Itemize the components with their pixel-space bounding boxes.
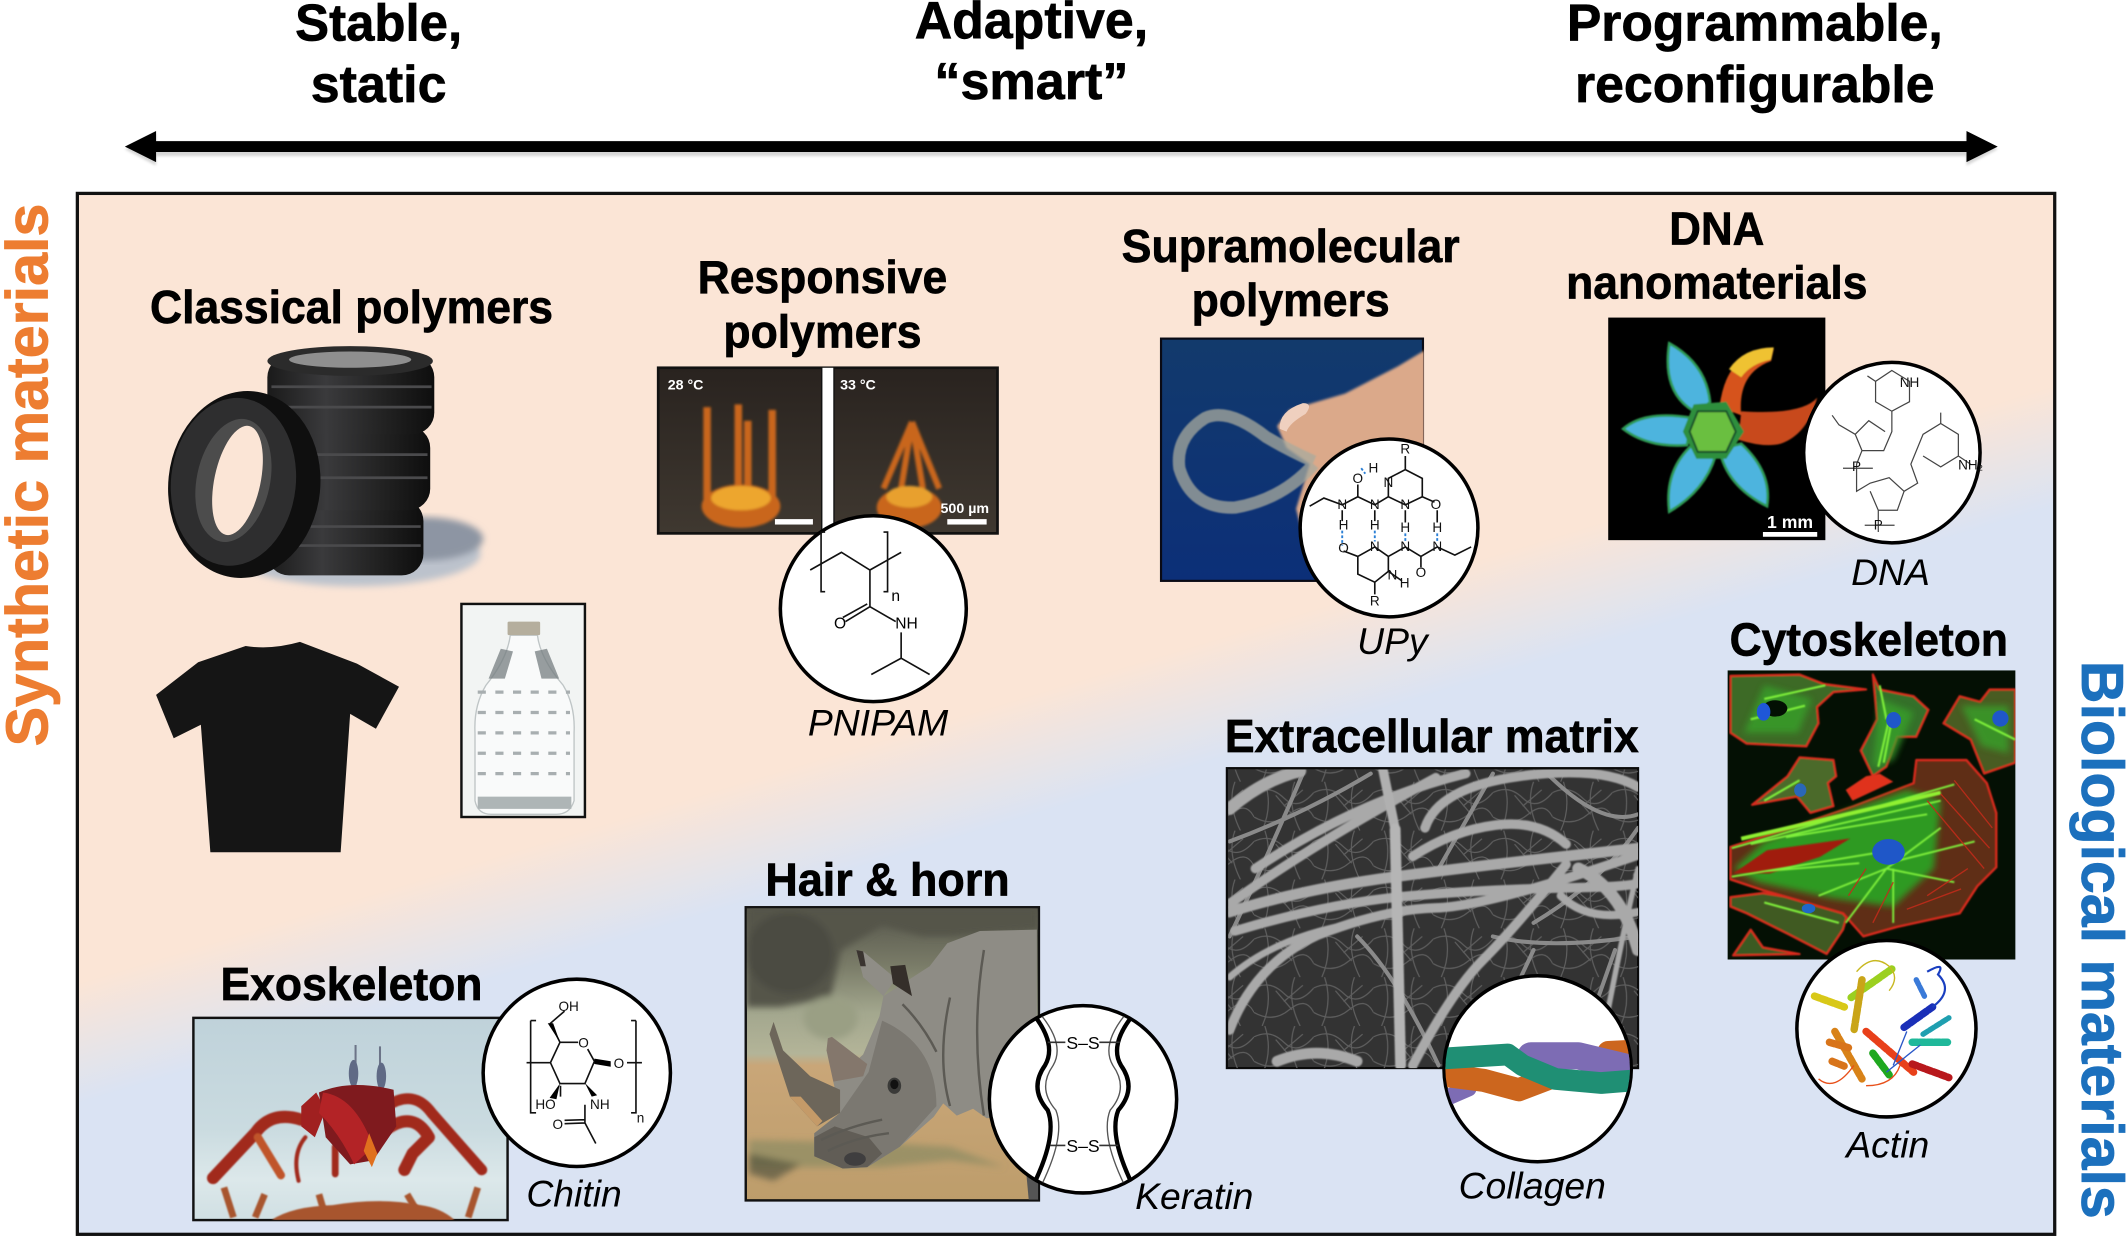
chemical structure: UPy: N [1400,497,1410,512]
chemical structure: UPy: O [1353,471,1363,486]
label: keratin: Keratin [1135,1175,1253,1217]
chemical structure: DNA: NH [1900,375,1919,390]
chemical structure: PNIPAM: NH [895,615,918,632]
chemical structure: PNIPAM: O [834,615,846,632]
chemical structure: DNA: NH₂ [1958,458,1983,473]
label: collagen: Collagen [1459,1164,1606,1206]
chemical structure: DNA: P [1874,517,1883,532]
photo: extracellular matrix SEM [1227,768,1644,1068]
chemical structure: keratin [989,1006,1177,1194]
chemical structure: UPy: O [1416,565,1426,580]
label: 33 °C: 33 °C [840,378,876,394]
protein structure: collagen [1441,976,1635,1162]
top heading: adaptive, smart: “smart” [934,52,1128,110]
chemical structure: UPy: N [1370,497,1380,512]
chemical structure: UPy: N [1432,539,1442,554]
chemical structure: UPy: N [1400,539,1410,554]
heading: cytoskeleton: Cytoskeleton [1730,614,2008,666]
top heading: stable, static: static [311,55,447,113]
heading: responsive polymers: polymers [723,305,921,357]
label: UPy: UPy [1357,620,1430,662]
top heading: stable, static [295,0,462,113]
chemical structure: UPy: H [1370,517,1380,532]
chemical structure: UPy: N [1370,539,1380,554]
chemical structure: PNIPAM: n [891,588,900,605]
chemical structure: UPy: O [1431,497,1441,512]
chemical structure: UPy: H [1400,576,1410,591]
heading: supramolecular polymers: Supramolecular [1122,220,1460,272]
photo: rhino [746,907,1039,1200]
label: 1 mm: 1 mm [1767,512,1813,532]
heading: supramolecular polymers [1122,220,1460,326]
chemical structure: UPy: H [1369,460,1378,475]
chemical structure: DNA [1804,362,1983,543]
heading: classical polymers: Classical polymers [150,281,553,333]
chemical structure: UPy: N [1383,475,1393,490]
heading: DNA nanomaterials [1566,202,1867,309]
label: actin: Actin [1844,1124,1929,1166]
label: 500 µm: 500 µm [940,501,989,517]
photo: UPy polymer band [1161,339,1425,581]
label: chitin: Chitin [526,1173,622,1215]
photo: DNA flower [1608,318,1825,540]
chemical structure: PNIPAM [780,516,966,702]
heading: DNA nanomaterials: DNA [1669,202,1764,254]
chemical structure: UPy: R [1370,593,1380,608]
heading: extracellular matrix: Extracellular matrix [1225,710,1639,762]
heading: DNA nanomaterials: nanomaterials [1566,257,1867,309]
icon: water bottle [461,604,585,817]
chemical structure: UPy: N [1388,568,1397,583]
icon: black t-shirt [156,642,399,852]
top heading: programmable, reconfigurable: reconfigurable [1575,55,1935,113]
panel: gradient background [77,193,2055,1234]
photo: cytoskeleton fluorescence [1728,670,2015,960]
chemical structure: chitin [483,979,670,1166]
chemical structure: chitin: O [578,1036,589,1051]
chemical structure: chitin: O [614,1056,624,1071]
photo panel: PNIPAM microstructures [657,366,999,535]
heading: responsive polymers: Responsive [698,251,947,303]
chemical structure: UPy [1300,439,1478,617]
chemical structure: UPy: N [1337,497,1347,512]
heading: supramolecular polymers: polymers [1192,274,1390,326]
chemical structure: chitin: O [553,1117,563,1132]
chemical structure: UPy: R [1400,441,1410,456]
top heading: programmable, reconfigurable [1567,0,1943,113]
icon: tires [159,346,483,586]
chemical structure: chitin: HO [535,1097,556,1112]
chemical structure: chitin: n [637,1110,644,1125]
chemical structure: DNA: P [1852,459,1861,474]
chemical structure: UPy: H [1432,520,1442,535]
photo: crab [193,1018,508,1220]
chemical structure: keratin: S–S [1066,1033,1100,1053]
chemical structure: UPy: H [1400,520,1410,535]
chemical structure: chitin: NH [590,1097,610,1112]
protein structure: actin [1797,941,1976,1117]
chemical structure: keratin: S–S [1066,1136,1100,1156]
heading: hair and horn: Hair & horn [765,854,1010,906]
label: PNIPAM: PNIPAM [808,702,949,744]
label: 28 °C: 28 °C [668,378,703,394]
chemical structure: UPy: H [1339,517,1348,532]
chemical structure: chitin: OH [558,999,579,1014]
double-headed arrow [125,131,1998,166]
label: DNA: DNA [1851,551,1930,593]
heading: responsive polymers [698,251,947,357]
top heading: adaptive, smart [915,0,1148,110]
heading: exoskeleton: Exoskeleton [221,958,482,1010]
chemical structure: UPy: O [1338,540,1349,555]
